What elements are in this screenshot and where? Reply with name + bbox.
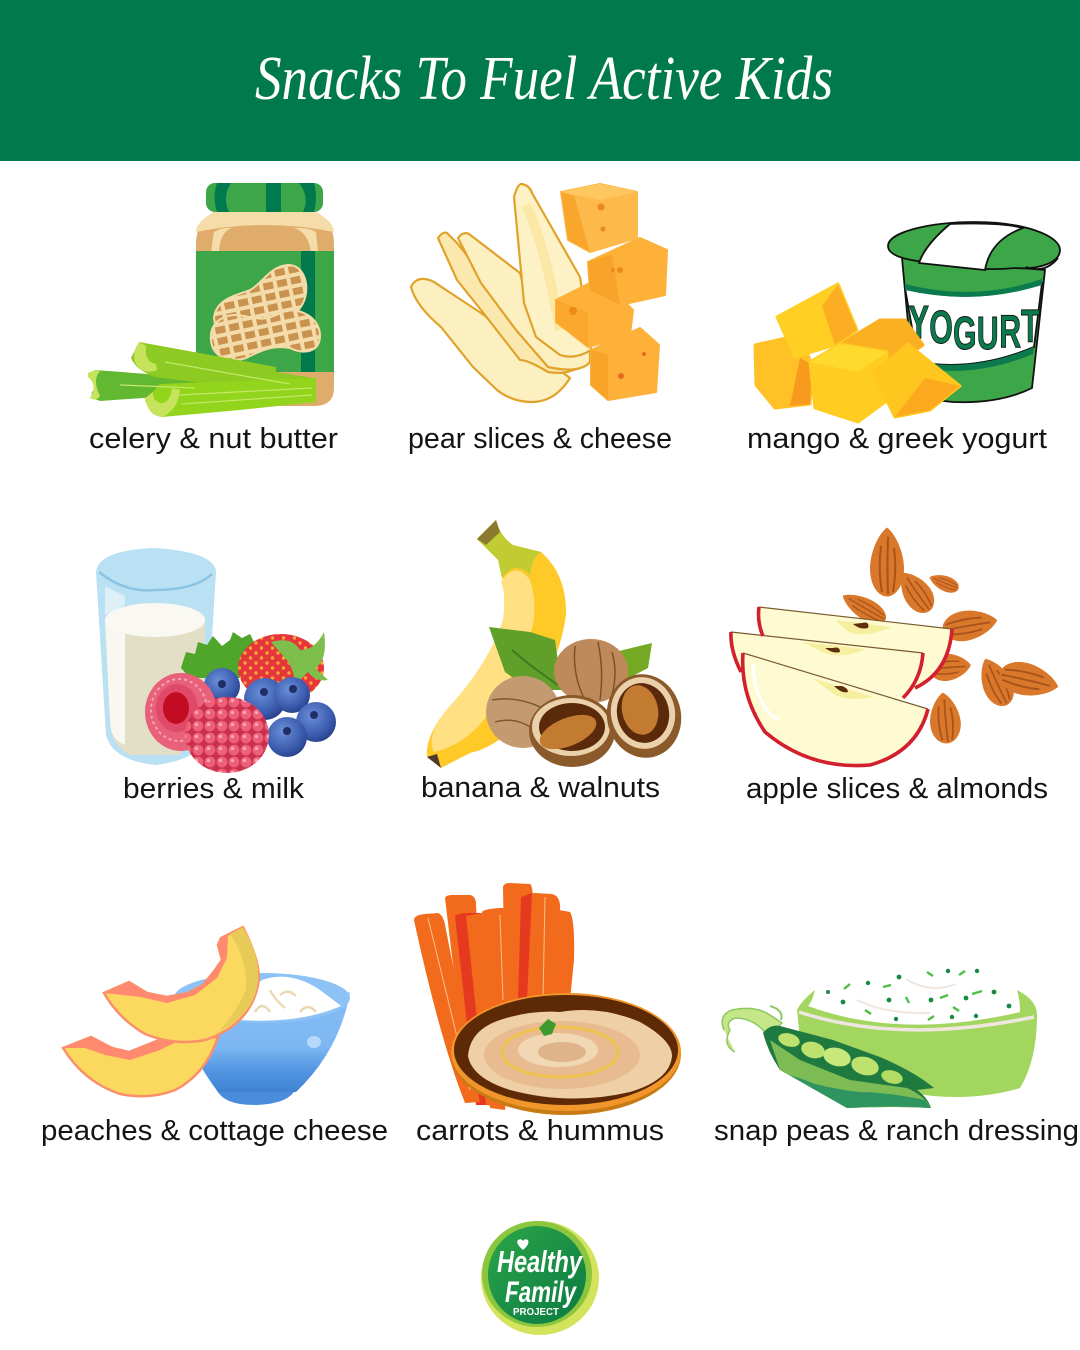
panel: peaches and cottage cheese	[41, 927, 388, 1147]
icon: celery sticks	[88, 342, 316, 417]
panel: berries and milk	[96, 548, 336, 805]
icon: snap pea pod	[722, 1006, 934, 1108]
logo wordmark: Family	[505, 1276, 577, 1309]
icon: cheese cubes	[556, 184, 667, 400]
panel: carrots and hummus	[414, 883, 681, 1147]
label: apple slices & almonds	[746, 773, 1048, 805]
icon: pear slices	[411, 184, 591, 402]
label: peaches & cottage cheese	[41, 1115, 388, 1147]
icon: yogurt cup	[888, 222, 1060, 402]
icon: almonds	[837, 528, 1062, 745]
panel: banana and walnuts	[421, 520, 689, 804]
label: snap peas & ranch dressing	[714, 1115, 1079, 1147]
icon: glass of milk	[96, 548, 216, 765]
icon: bowl of cottage cheese	[170, 973, 350, 1105]
panel: celery and nut butter	[88, 183, 338, 455]
icon: nut butter jar	[196, 183, 334, 406]
label: banana & walnuts	[421, 772, 660, 804]
panel: apple slices and almonds	[731, 528, 1062, 805]
icon: upper peach slice	[104, 927, 259, 1042]
icon: lower peach slice	[63, 1037, 218, 1096]
icon: bowl of hummus	[451, 993, 681, 1115]
logo wordmark: PROJECT	[513, 1307, 559, 1318]
icon: walnuts and leaves	[486, 627, 689, 767]
header banner	[0, 0, 1080, 161]
label: pear slices & cheese	[408, 423, 672, 455]
logo wordmark: Healthy	[497, 1244, 583, 1279]
label: berries & milk	[123, 773, 305, 805]
label: mango & greek yogurt	[747, 423, 1047, 455]
label: celery & nut butter	[89, 423, 338, 455]
title: Snacks To Fuel Active Kids	[255, 45, 833, 113]
icon: heart	[517, 1239, 528, 1250]
icon: banana	[427, 520, 566, 768]
label: carrots & hummus	[416, 1115, 664, 1147]
panel: pear slices and cheese	[408, 184, 672, 455]
logo: Healthy Family Project	[481, 1221, 599, 1335]
logo wordmark	[497, 1244, 583, 1318]
yogurt label text: YOGURT	[909, 298, 1040, 360]
icon: mango cubes	[755, 284, 960, 422]
icon: carrot sticks	[414, 883, 574, 1110]
panel: snap peas and ranch dressing	[714, 969, 1079, 1147]
panel: mango and greek yogurt	[747, 222, 1060, 455]
icon: berries	[145, 632, 336, 773]
icon: apple slices	[731, 607, 952, 766]
icon: bowl of ranch dressing	[797, 969, 1037, 1097]
